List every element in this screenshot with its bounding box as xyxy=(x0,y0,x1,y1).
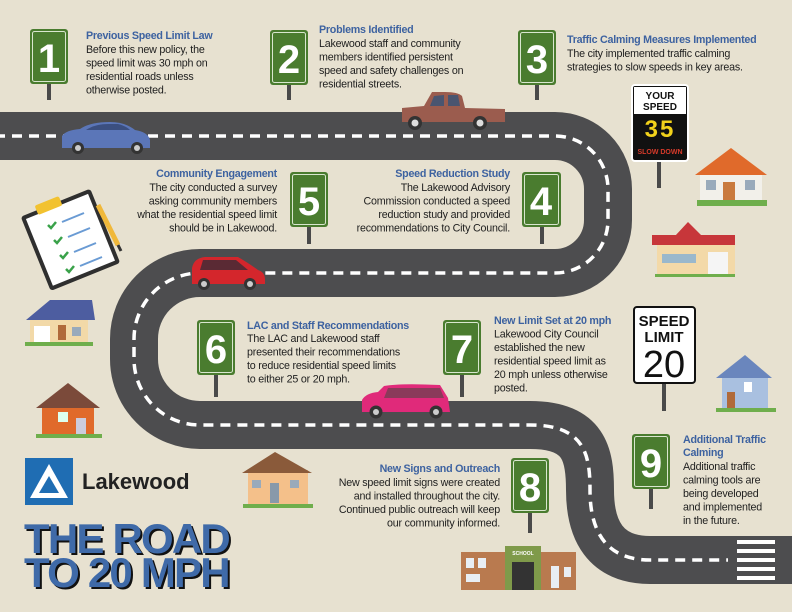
your speed sign: YOUR xyxy=(646,91,675,102)
blue car xyxy=(62,122,150,154)
text 7: residential speed limit as xyxy=(494,356,606,368)
text 7: established the new xyxy=(494,342,585,354)
sign 2: 2 xyxy=(278,38,300,82)
logo xyxy=(25,458,190,505)
speed limit 20 sign xyxy=(634,307,695,411)
title: TO 20 MPH xyxy=(24,549,229,596)
text 3: The city implemented traffic calming xyxy=(567,48,730,60)
sign 1 xyxy=(30,29,68,100)
text 7 xyxy=(494,315,611,394)
text 2: members identified persistent xyxy=(319,52,453,64)
house: top right xyxy=(695,148,767,206)
text 9: Additional Traffic xyxy=(683,434,766,446)
text 6: LAC and Staff Recommendations xyxy=(247,320,409,332)
text 5: what the residential speed limit xyxy=(136,209,277,221)
text 2: Lakewood staff and community xyxy=(319,38,461,50)
text 9: being developed xyxy=(683,488,759,500)
text 8: Continued public outreach will keep xyxy=(339,504,500,516)
pink car xyxy=(362,384,450,418)
text 9: Additional traffic xyxy=(683,461,756,473)
house: near title xyxy=(242,452,313,508)
text 4: Speed Reduction Study xyxy=(395,168,510,180)
sign 7 xyxy=(443,320,481,397)
text 4 xyxy=(357,168,511,234)
title: TO 20 MPH xyxy=(26,551,231,598)
text 2: Problems Identified xyxy=(319,24,413,36)
sign 9 xyxy=(632,434,670,509)
sign 2 xyxy=(270,30,308,100)
sign 6 xyxy=(197,320,235,397)
title: THE ROAD xyxy=(26,517,231,564)
road xyxy=(0,136,792,580)
speed limit 20 sign: LIMIT xyxy=(644,329,684,346)
sign 9: 9 xyxy=(640,442,662,486)
text 1: residential roads unless xyxy=(86,71,193,83)
text 5: Community Engagement xyxy=(156,168,278,180)
text 9: and implemented xyxy=(683,502,762,514)
sign 4 xyxy=(522,172,561,244)
text 7: Lakewood City Council xyxy=(494,328,599,340)
icon: clipboard xyxy=(21,189,121,291)
text 6: The LAC and Lakewood staff xyxy=(247,333,380,345)
text 1: Before this new policy, the xyxy=(86,44,205,56)
your speed sign: 35 xyxy=(645,116,675,143)
text 9: Calming xyxy=(683,447,723,459)
text 4: Commission conducted a speed xyxy=(364,196,510,208)
text 4: recommendations to City Council. xyxy=(357,222,510,234)
sign 6: 6 xyxy=(205,328,227,372)
sign 8: 8 xyxy=(519,466,541,510)
text 8 xyxy=(339,463,500,530)
red car xyxy=(192,257,265,290)
sign 5: 5 xyxy=(298,180,320,224)
text 6: presented their recommendations xyxy=(247,346,400,358)
text 7: 20 mph unless otherwise xyxy=(494,369,608,381)
text 3: strategies to slow speeds in key areas. xyxy=(567,62,743,74)
crosswalk xyxy=(737,540,775,580)
text 4: The Lakewood Advisory xyxy=(401,182,511,194)
text 9 xyxy=(683,434,766,527)
sign 3: 3 xyxy=(526,38,548,82)
text 3 xyxy=(567,34,756,74)
text 1: Previous Speed Limit Law xyxy=(86,30,213,42)
text 8: New speed limit signs were created xyxy=(339,477,500,489)
logo: Lakewood xyxy=(82,469,190,494)
house: left blue roof xyxy=(25,300,95,346)
your speed sign: SPEED xyxy=(643,102,677,113)
sign 7: 7 xyxy=(451,328,473,372)
text 5: The city conducted a survey xyxy=(149,182,278,194)
text 2 xyxy=(319,24,464,90)
text 6: to either 25 or 20 mph. xyxy=(247,374,350,386)
speed limit 20 sign: SPEED xyxy=(639,313,690,330)
text 2: speed and safety challenges on xyxy=(319,65,464,77)
house: right blue xyxy=(716,355,776,412)
text 9: calming tools are xyxy=(683,474,761,486)
text 2: residential streets. xyxy=(319,78,402,90)
text 9: in the future. xyxy=(683,515,740,527)
text 1: speed limit was 30 mph on xyxy=(86,58,208,70)
sign 5 xyxy=(290,172,328,244)
title xyxy=(24,515,231,598)
text 1 xyxy=(86,30,213,96)
sign 4: 4 xyxy=(530,180,553,224)
text 7: New Limit Set at 20 mph xyxy=(494,315,611,327)
school xyxy=(461,546,576,590)
text 8: our community informed. xyxy=(387,518,500,530)
pickup truck xyxy=(402,92,505,130)
text 6 xyxy=(247,320,409,386)
text 8: and installed throughout the city. xyxy=(354,490,500,502)
sign 3 xyxy=(518,30,556,100)
school: SCHOOL xyxy=(512,551,534,557)
sign 8 xyxy=(511,458,549,533)
your speed sign xyxy=(632,85,688,188)
house: left orange xyxy=(36,383,102,438)
house: red roof xyxy=(652,222,735,277)
text 8: New Signs and Outreach xyxy=(380,463,500,475)
text 3: Traffic Calming Measures Implemented xyxy=(567,34,756,46)
text 7: posted. xyxy=(494,382,528,394)
text 6: to reduce residential speed limits xyxy=(247,360,396,372)
text 1: otherwise posted. xyxy=(86,84,166,96)
text 4: reduction study and provided xyxy=(378,209,510,221)
your speed sign: SLOW DOWN xyxy=(637,149,683,156)
text 5 xyxy=(136,168,278,234)
text 5: asking community members xyxy=(149,196,277,208)
sign 1: 1 xyxy=(38,37,60,81)
speed limit 20 sign: 20 xyxy=(643,344,685,386)
text 5: should be in Lakewood. xyxy=(169,222,277,234)
title: THE ROAD xyxy=(24,515,229,562)
